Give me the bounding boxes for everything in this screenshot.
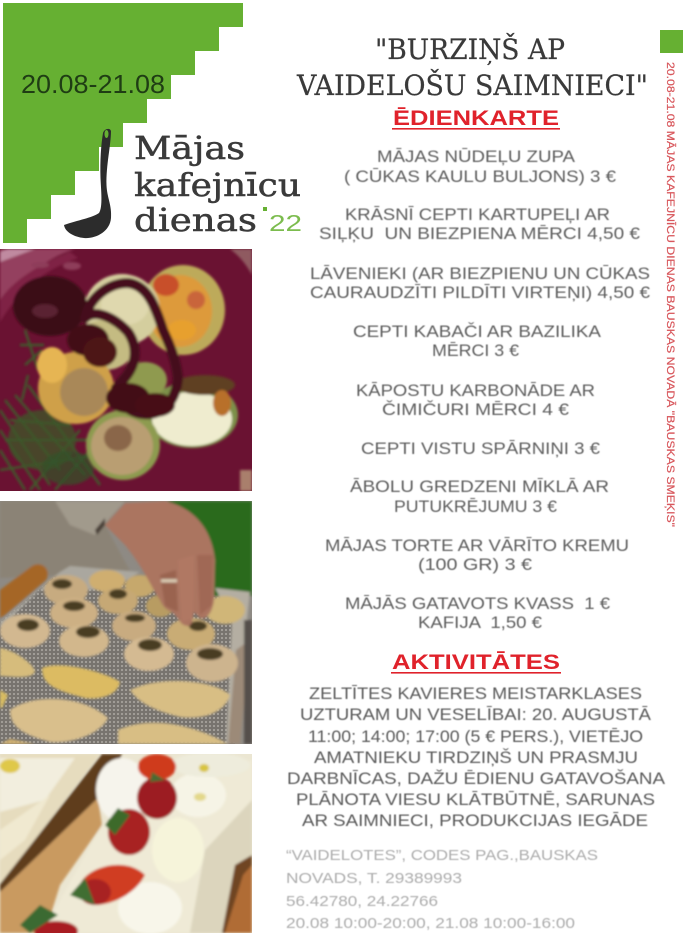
- icon: ladle: [64, 129, 111, 238]
- menu list: MĀJĀS GATAVOTS KVASS 1 €: [345, 595, 610, 613]
- activities text: AR SAIMNIECI, PRODUKCIJAS IEGĀDE: [302, 811, 648, 830]
- title: VAIDELOŠU SAIMNIECI": [296, 68, 648, 102]
- leaves: [105, 808, 130, 835]
- logo text: [134, 129, 302, 239]
- menu list: CEPTI KABAČI AR BAZILIKA: [353, 322, 601, 341]
- menu list: CEPTI VISTU SPĀRNIŅI 3 €: [361, 440, 600, 458]
- activities text: DARBNĪCAS, DAŽU ĒDIENU GATAVOŠANA: [287, 769, 666, 788]
- logo text: kafejnīcu: [134, 166, 301, 204]
- heading: activities: AKTIVITĀTES: [392, 650, 560, 674]
- date heading: 20.08-21.08: [21, 69, 165, 99]
- photo: fried zucchini on burgundy plate: [0, 249, 252, 491]
- contact details: 20.08 10:00-20:00, 21.08 10:00-16:00: [286, 915, 575, 932]
- vertical side text: 20.08-21.08 MĀJAS KAFEJNĪCU DIENAS BAUSKAS NOVADĀ "BAUSKAS SMEĶIS": [664, 62, 676, 527]
- menu list: SIĻĶU UN BIEZPIENA MĒRCI 4,50 €: [319, 225, 640, 243]
- title: [296, 32, 648, 102]
- logo text: 22: [269, 210, 302, 236]
- green stepped banner: [3, 3, 243, 243]
- logo text: dienas: [134, 201, 257, 239]
- menu list: ( CŪKAS KAULU BULJONS) 3 €: [344, 168, 616, 186]
- slices: [141, 265, 225, 355]
- sauce: [13, 276, 87, 336]
- menu list: (100 GR) 3 €: [418, 556, 532, 574]
- photo: pastries on baking tray: [0, 501, 252, 744]
- menu list: PUTUKRĒJUMU 3 €: [394, 498, 557, 516]
- activities text: AMATNIEKU TIRDZIŅŠ UN PRASMJU: [314, 748, 638, 767]
- menu list: KAFIJA 1,50 €: [418, 614, 542, 632]
- tray rim: [0, 566, 140, 628]
- contact details: [286, 847, 598, 932]
- dill: [0, 330, 100, 490]
- activities text: UZTURAM UN VESELĪBAI: 20. AUGUSTĀ: [300, 705, 652, 724]
- menu list: ČIMIČURI MĒRCI 4 €: [382, 400, 569, 419]
- menu list: KRĀSNĪ CEPTI KARTUPEĻI AR: [345, 206, 610, 224]
- flowers: [96, 758, 148, 822]
- menu list: MĒRCI 3 €: [432, 342, 519, 360]
- green square: [660, 30, 683, 53]
- heading: menu: ĒDIENKARTE: [393, 106, 559, 130]
- menu list: MĀJAS TORTE AR VĀRĪTO KREMU: [325, 537, 629, 555]
- photo: torte with strawberries: [0, 753, 252, 933]
- activities text: PLĀNOTA VIESU KLĀTBŪTNĒ, SARUNAS: [296, 790, 655, 809]
- title: "BURZIŅŠ AP: [375, 32, 565, 66]
- menu list: LĀVENIEKI (AR BIEZPIENU UN CŪKAS: [310, 265, 650, 283]
- activities text: [287, 684, 666, 830]
- contact details: “VAIDELOTES”, CODES PAG.,BAUSKAS: [286, 847, 598, 864]
- logo text: Mājas: [134, 129, 245, 167]
- hand: [105, 501, 215, 626]
- mesh tray: [0, 572, 240, 744]
- activities text: 11:00; 14:00; 17:00 (5 € PERS.), VIETĒJO: [308, 727, 643, 746]
- menu list: KĀPOSTU KARBONĀDE AR: [356, 382, 595, 400]
- menu list: ĀBOLU GREDZENI MĪKLĀ AR: [350, 478, 609, 496]
- menu list: [310, 148, 650, 632]
- contact details: NOVADS, T. 29389993: [286, 870, 462, 887]
- strawberries: [137, 777, 177, 819]
- contact details: 56.42780, 24.22766: [286, 893, 438, 910]
- menu list: CAURAUDZĪTI PILDĪTI VIRTEŅI) 4,50 €: [310, 284, 650, 302]
- filled buns: [44, 575, 88, 605]
- rolling pin: [0, 564, 48, 618]
- half moon pastries: [0, 648, 35, 677]
- activities text: ZELTĪTES KAVIERES MEISTARKLASES: [309, 684, 642, 703]
- menu list: MĀJAS NŪDEĻU ZUPA: [377, 148, 575, 166]
